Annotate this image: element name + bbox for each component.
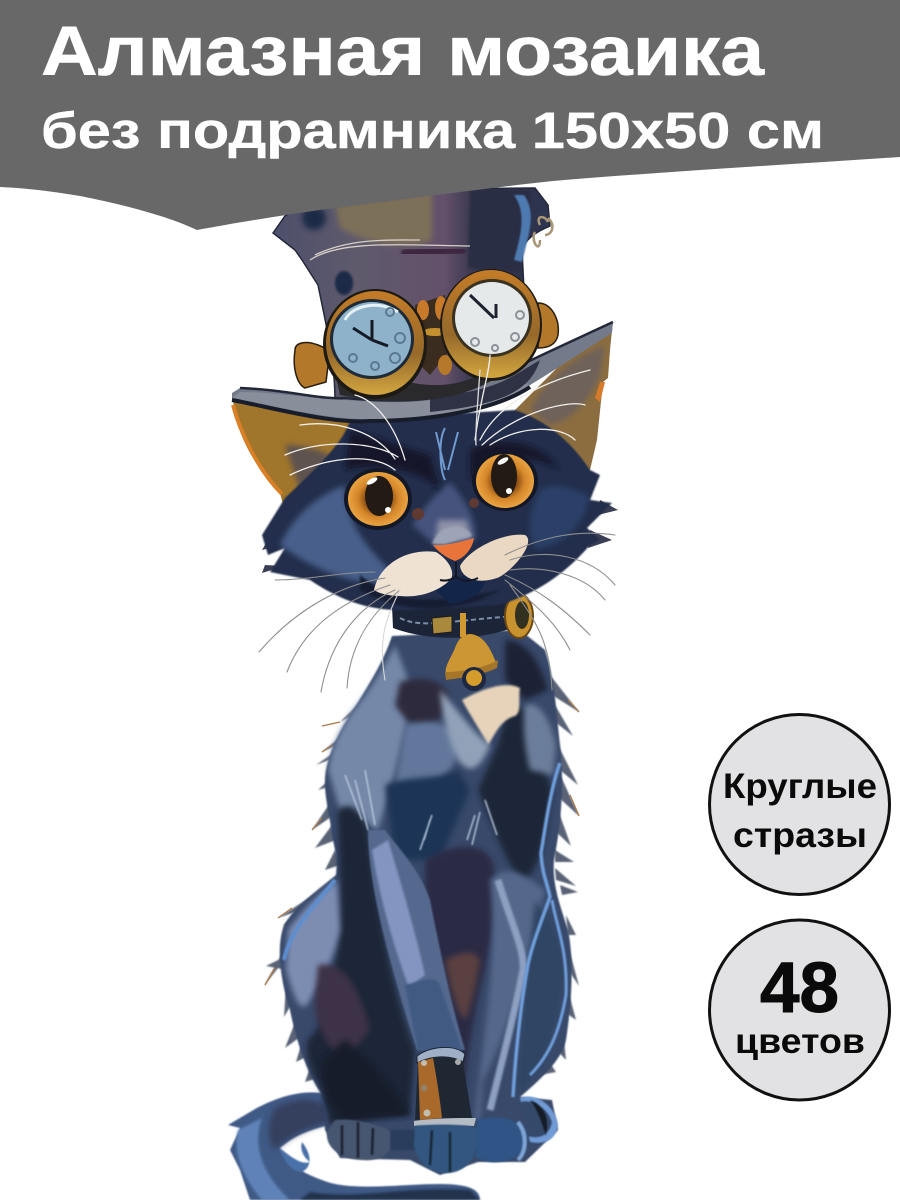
badge text line 2: стразы	[733, 816, 867, 855]
white bib	[462, 685, 520, 745]
chin	[430, 570, 486, 604]
rivets near eyes	[412, 508, 424, 520]
muzzle	[374, 526, 528, 596]
badge: 48 colours	[710, 920, 890, 1100]
number 48: 48	[760, 949, 839, 1028]
title: Алмазная мозаика	[41, 12, 765, 90]
side fur	[262, 500, 618, 573]
left ear	[233, 400, 350, 512]
badge: round rhinestones	[710, 714, 890, 894]
header banner	[0, 0, 900, 230]
tail	[228, 1092, 480, 1200]
hat crown	[273, 188, 550, 400]
whiskers	[285, 355, 590, 475]
foreleg	[368, 830, 465, 1050]
subtitle: без подрамника 150х50 см	[41, 102, 824, 159]
badge caption: цветов	[735, 1022, 865, 1061]
cat head	[262, 410, 618, 610]
right goggle	[440, 269, 542, 381]
left eye	[344, 468, 412, 530]
rings on hat	[534, 217, 552, 246]
top hat	[232, 188, 613, 421]
hat brim	[232, 322, 613, 420]
badge text line 1: Круглые	[723, 767, 877, 806]
paws	[327, 1097, 558, 1173]
bridge	[415, 295, 450, 375]
cat body	[264, 630, 579, 1175]
cat illustration	[228, 188, 618, 1200]
collar with bell	[392, 594, 533, 691]
body colour patches	[328, 645, 412, 830]
side cap left	[294, 343, 330, 388]
bright blue highlights	[513, 763, 560, 1097]
cuff on foreleg	[414, 1047, 476, 1126]
side cap right	[538, 303, 558, 348]
long whiskers outside the cat	[259, 533, 615, 692]
banner background	[0, 0, 900, 230]
fur fringe	[264, 675, 579, 1082]
right eye	[472, 451, 538, 511]
left goggle	[323, 289, 427, 399]
steampunk goggles	[294, 269, 558, 399]
right ear	[515, 330, 612, 470]
bell	[445, 634, 498, 691]
